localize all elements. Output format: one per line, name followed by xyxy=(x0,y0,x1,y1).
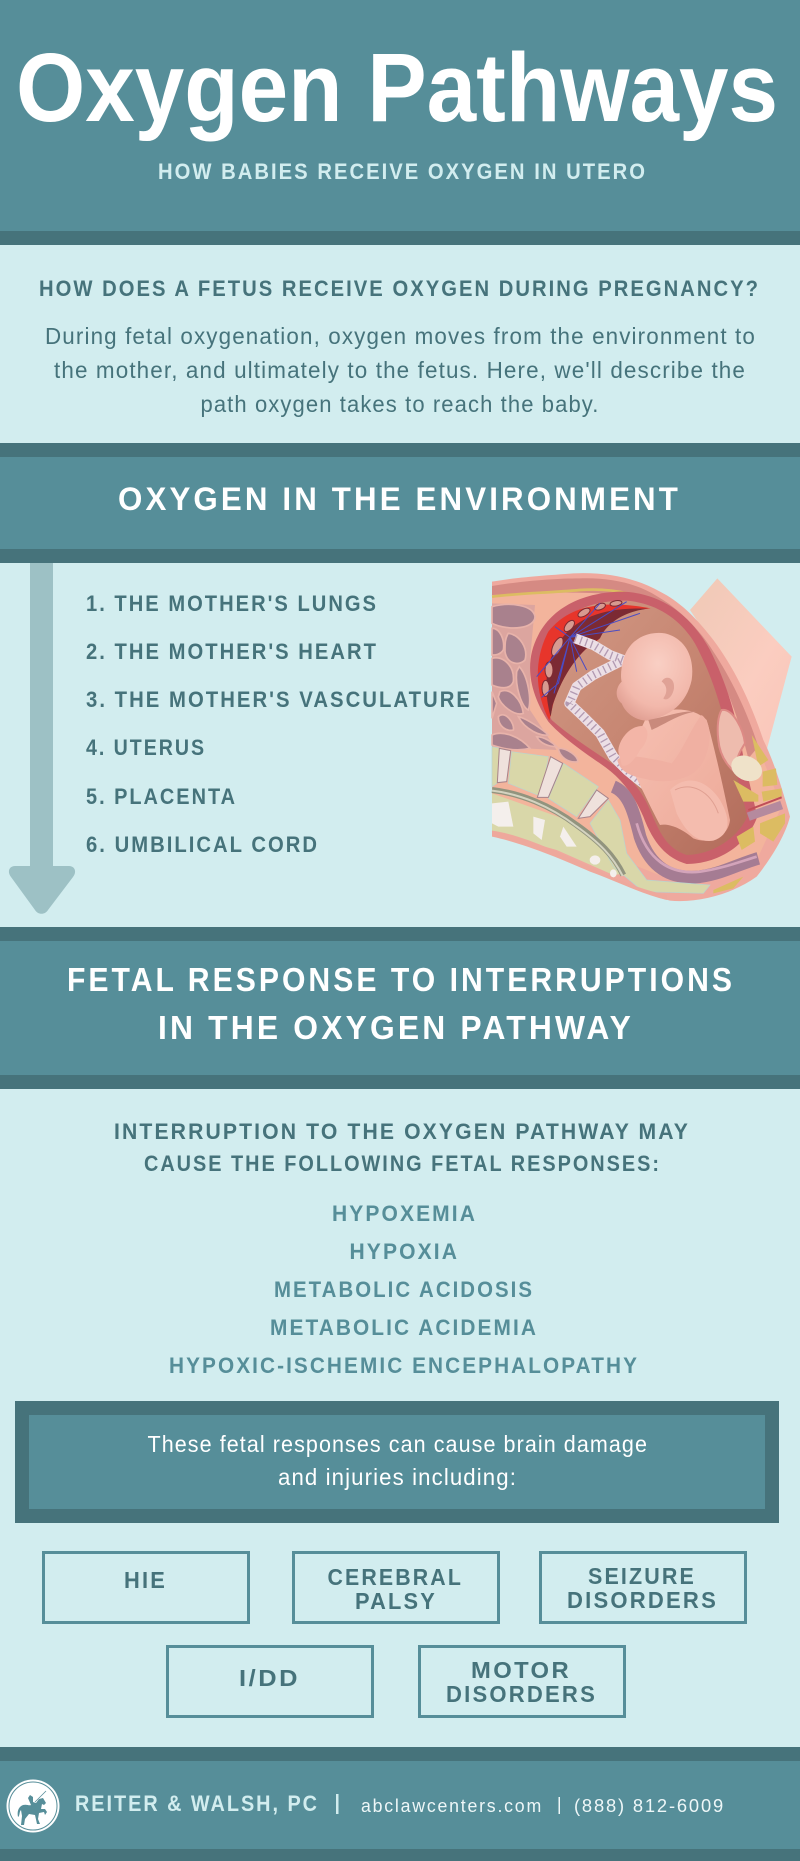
section heading: OXYGEN IN THE ENVIRONMENT xyxy=(118,481,681,517)
intro body text xyxy=(45,323,756,417)
box: cerebral palsy xyxy=(294,1552,498,1622)
bladder xyxy=(718,710,745,777)
website: abclawcenters.com xyxy=(361,1796,543,1816)
fetus arm xyxy=(617,715,710,781)
icon: horse and rider logo xyxy=(6,1780,60,1832)
box: cerebral palsy: CEREBRAL xyxy=(328,1564,463,1590)
subtitle: HOW BABIES RECEIVE OXYGEN IN UTERO xyxy=(158,159,647,184)
small divider xyxy=(558,1797,560,1814)
pathway list: 4. UTERUS xyxy=(86,735,206,760)
rectum xyxy=(613,787,758,877)
panel: introduction xyxy=(0,245,800,443)
box: motor disorders: DISORDERS xyxy=(446,1681,597,1707)
callout: brain damage and injuries xyxy=(15,1401,779,1523)
fetus hand xyxy=(618,726,647,766)
pathway list xyxy=(86,591,472,857)
fetal responses list: HYPOXIC-ISCHEMIC ENCEPHALOPATHY xyxy=(169,1353,639,1378)
lower spine fill xyxy=(492,793,627,875)
pathway list: 1. THE MOTHER'S LUNGS xyxy=(86,591,378,616)
box: motor disorders: MOTOR xyxy=(471,1657,571,1683)
intro body text: During fetal oxygenation, oxygen moves from the environment to xyxy=(45,323,756,349)
amniotic cavity xyxy=(540,601,747,855)
interruption subheading xyxy=(114,1119,690,1176)
placenta xyxy=(537,600,651,721)
fetal response title: IN THE OXYGEN PATHWAY xyxy=(158,1009,634,1046)
vaginal canal xyxy=(748,805,782,817)
box: I/DD: I/DD xyxy=(239,1665,300,1691)
arrow: downward pathway xyxy=(9,563,75,914)
fetal responses list xyxy=(169,1201,639,1378)
fetal responses list: HYPOXIA xyxy=(350,1239,459,1264)
lower back skin xyxy=(492,831,667,900)
pathway list: 3. THE MOTHER'S VASCULATURE xyxy=(86,687,472,712)
fetal responses list: HYPOXEMIA xyxy=(332,1201,477,1226)
box: motor disorders xyxy=(420,1646,624,1716)
abdominal wall band xyxy=(492,578,758,758)
uterus wall xyxy=(530,592,757,864)
callout: brain damage and injuries: and injuries including: xyxy=(278,1464,517,1490)
interruption subheading: CAUSE THE FOLLOWING FETAL RESPONSES: xyxy=(144,1151,661,1176)
panel: oxygen in the environment heading xyxy=(0,443,800,563)
pathway list: 5. PLACENTA xyxy=(86,784,237,809)
divider bar xyxy=(336,1794,338,1814)
intro body text: the mother, and ultimately to the fetus. Here, we'll describe the xyxy=(54,357,746,383)
interruption subheading: INTERRUPTION TO THE OXYGEN PATHWAY MAY xyxy=(114,1119,690,1144)
panel: footer xyxy=(0,1747,800,1861)
fetus head xyxy=(617,633,692,721)
spinal cord xyxy=(492,790,623,875)
box: I/DD xyxy=(168,1646,372,1716)
fetal response title xyxy=(67,961,735,1046)
organ cavity xyxy=(492,603,557,750)
fetal response title: FETAL RESPONSE TO INTERRUPTIONS xyxy=(67,961,735,998)
sacral bones xyxy=(492,802,617,877)
interior fat xyxy=(492,590,782,883)
box: HIE: HIE xyxy=(124,1567,167,1593)
callout: brain damage and injuries: These fetal responses can cause brain damage xyxy=(148,1431,648,1457)
panel: fetal response heading xyxy=(0,927,800,1089)
intro body text: path oxygen takes to reach the baby. xyxy=(200,391,600,417)
pathway list: 6. UMBILICAL CORD xyxy=(86,832,319,857)
panel: header xyxy=(0,0,800,245)
box: seizure disorders xyxy=(540,1552,746,1622)
vertebrae xyxy=(492,747,710,893)
phone number: (888) 812-6009 xyxy=(574,1796,725,1816)
box: cerebral palsy: PALSY xyxy=(355,1588,437,1614)
firm name: REITER & WALSH, PC xyxy=(75,1791,319,1816)
intestines xyxy=(492,604,578,762)
box: seizure disorders: SEIZURE xyxy=(588,1563,696,1589)
fetus body xyxy=(627,710,730,841)
box: HIE xyxy=(44,1552,248,1622)
box: seizure disorders: DISORDERS xyxy=(567,1587,718,1613)
illustration: fetus in utero cross-section xyxy=(492,573,792,901)
thigh xyxy=(690,578,792,750)
fat pads and bone xyxy=(752,735,768,767)
body silhouette xyxy=(492,573,790,901)
umbilical cord xyxy=(569,638,652,790)
pathway list: 2. THE MOTHER'S HEART xyxy=(86,639,378,664)
fetus leg xyxy=(670,781,728,841)
fetal responses list: METABOLIC ACIDOSIS xyxy=(274,1277,534,1302)
fetal responses list: METABOLIC ACIDEMIA xyxy=(270,1315,538,1340)
